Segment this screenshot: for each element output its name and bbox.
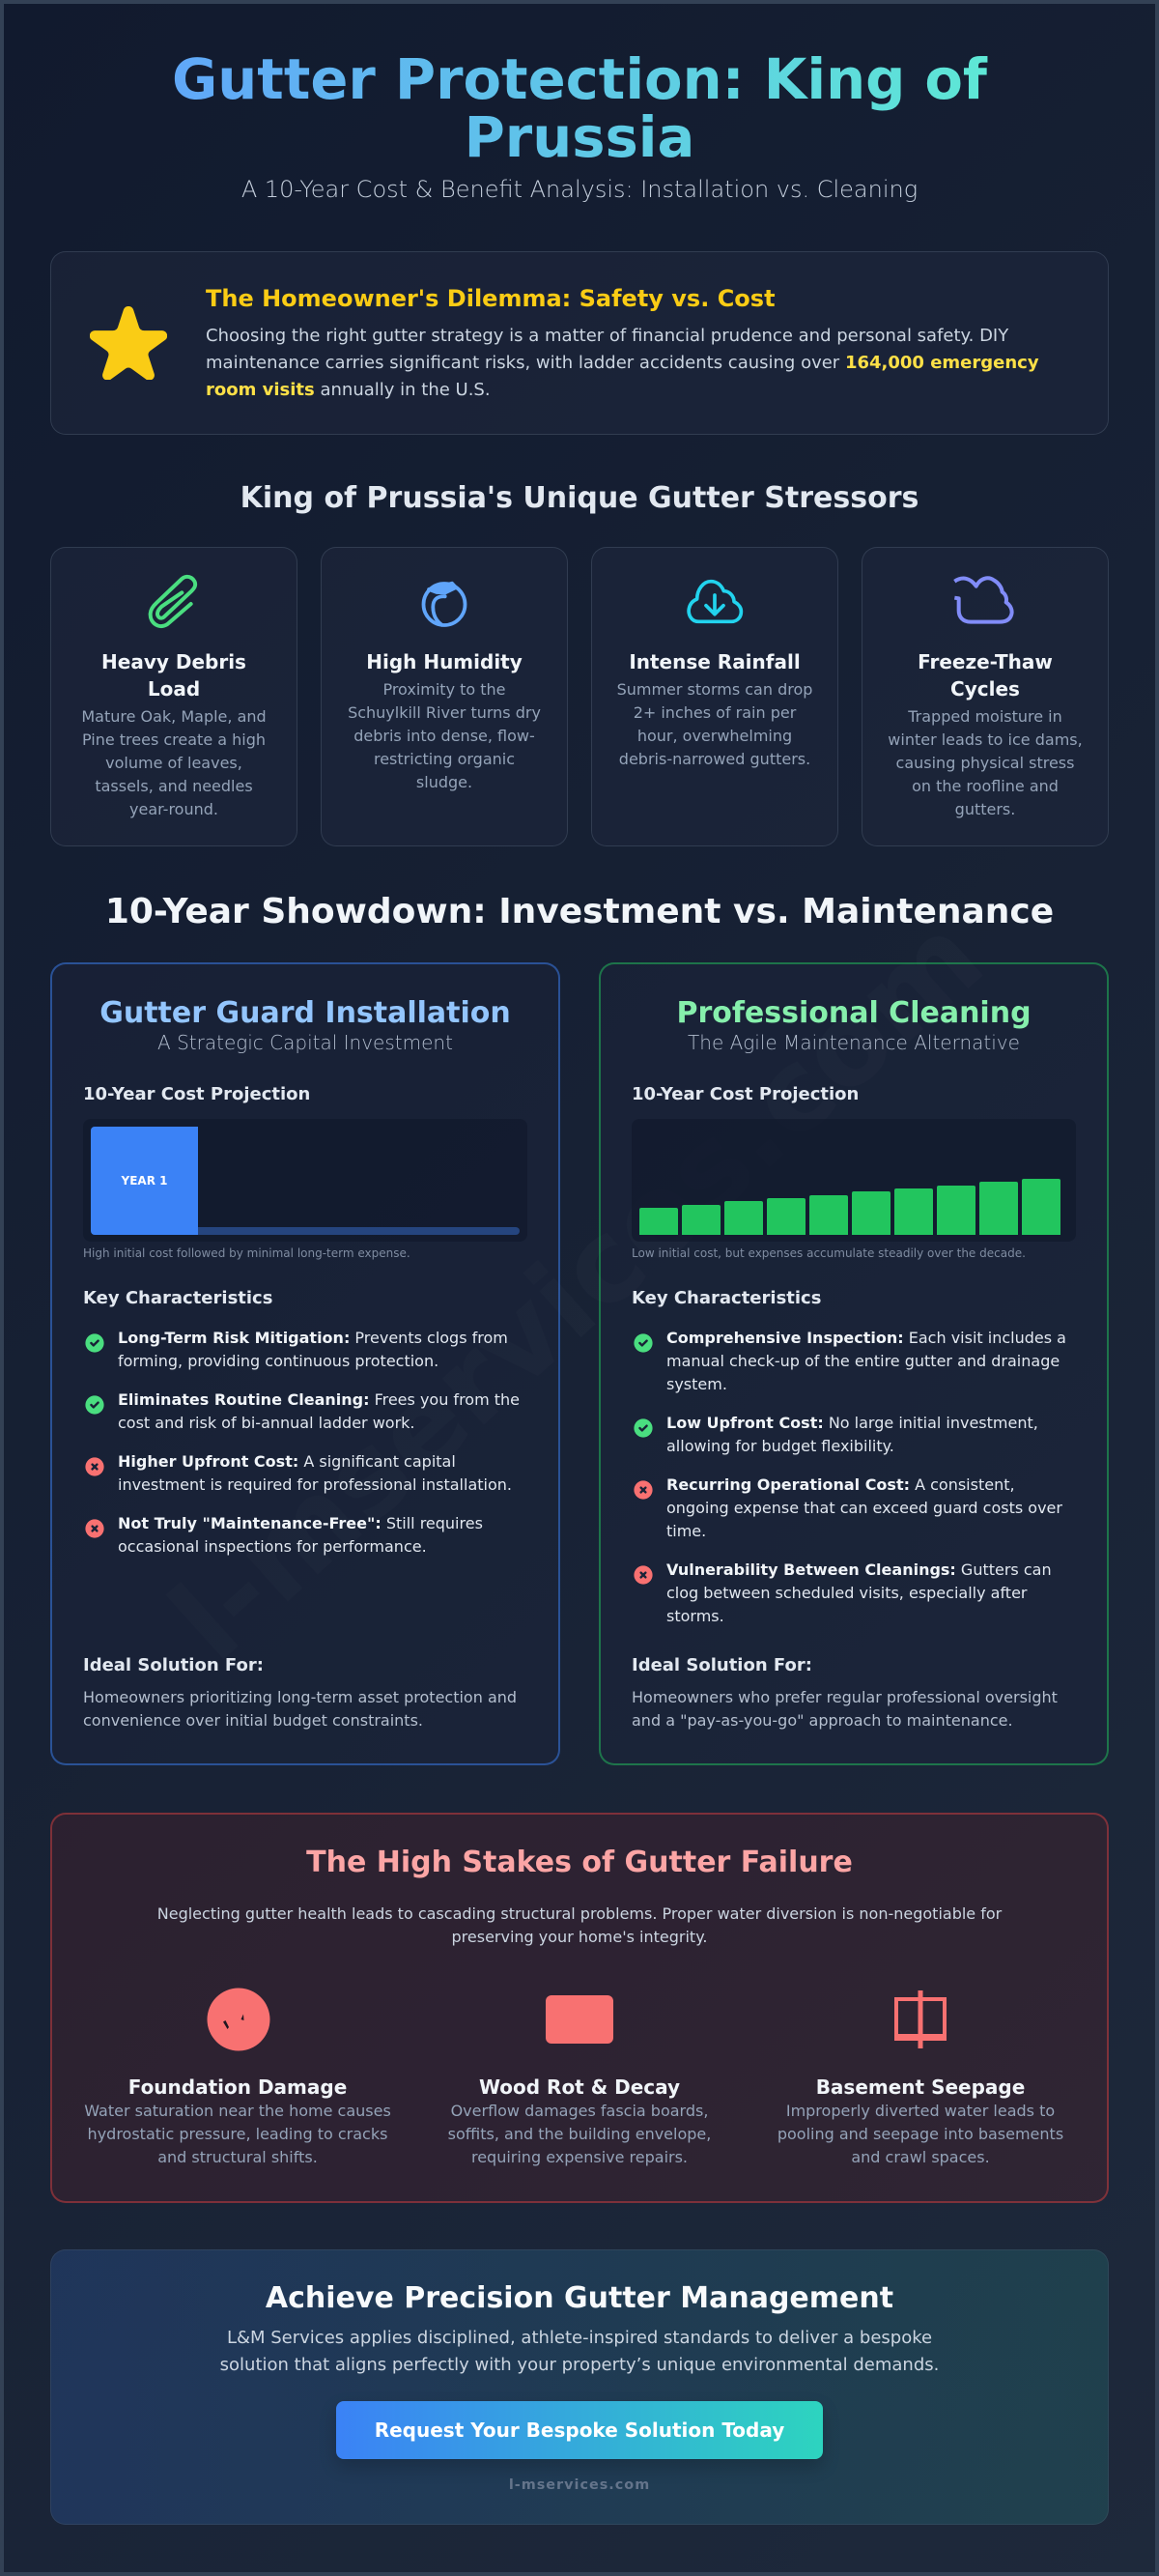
card text: on the roofline and [912, 777, 1059, 795]
list item: low upfront cost: Low Upfront Cost: No large initial investment, [666, 1414, 1038, 1432]
card text: Summer storms can drop [617, 680, 812, 699]
body text: L&M Services applies disciplined, athlete-inspired standards to deliver a bespoke [227, 2328, 932, 2348]
card text: restricting organic [374, 750, 515, 768]
panel: gutter guard installation: investment is required for professional installation. [118, 1475, 512, 1494]
list item: vulnerability [634, 1560, 1052, 1625]
card text: tassels, and needles [95, 777, 253, 795]
title: Prussia [465, 105, 694, 170]
panel: call to action [50, 2249, 1109, 2525]
list item: risk mitigation [85, 1329, 508, 1370]
card title [101, 650, 246, 701]
card text: Proximity to the [382, 680, 506, 699]
list item: vulnerability: Vulnerability Between Cleanings: Gutters can [666, 1560, 1052, 1579]
impact title: Foundation Damage [128, 2075, 347, 2099]
panel: professional cleaning: storms. [666, 1607, 724, 1625]
intro text [157, 1904, 1003, 1946]
column subtitle: A Strategic Capital Investment [157, 1031, 453, 1054]
icon: cracked foundation [207, 1989, 270, 2050]
heading: The Homeowner's Dilemma: Safety vs. Cost [206, 285, 776, 312]
panel: high stakes of gutter failure [50, 1813, 1109, 2203]
impact text: and structural shifts. [157, 2148, 318, 2166]
card text: volume of leaves, [105, 754, 242, 772]
card title: Cycles [950, 677, 1020, 701]
column title: Professional Cleaning [676, 996, 1032, 1030]
heading: showdown: 10-Year Showdown: Investment vs. Maintenance [105, 892, 1054, 931]
panel: gutter guard installation: occasional inspections for performance. [118, 1537, 427, 1556]
impact: wood rot [448, 2075, 711, 2166]
card text [81, 707, 267, 818]
impact: basement seepage [777, 2075, 1063, 2166]
card text: Trapped moisture in [908, 707, 1062, 726]
icon: humidity drop [421, 582, 467, 627]
body text [206, 326, 1039, 400]
list item: upfront cost [85, 1452, 512, 1494]
card text: gutters. [955, 800, 1015, 818]
impact text: Overflow damages fascia boards, [451, 2102, 708, 2120]
impact text: soffits, and the building envelope, [448, 2125, 711, 2143]
list item: inspection: Comprehensive Inspection: Each visit includes a [666, 1329, 1066, 1347]
subtitle: A 10-Year Cost & Benefit Analysis: Installation vs. Cleaning [241, 176, 918, 203]
card title: Heavy Debris [101, 650, 246, 673]
panel: professional cleaning: allowing for budget flexibility. [666, 1437, 894, 1455]
panel: professional cleaning: system. [666, 1375, 727, 1393]
title: Gutter Protection: King of [172, 47, 987, 112]
website: l-mservices.com [509, 2477, 650, 2493]
impact text: and crawl spaces. [851, 2148, 990, 2166]
icon: wood block [546, 1995, 613, 2044]
card title: Load [148, 677, 200, 701]
ideal text: Homeowners prioritizing long-term asset protection and [83, 1688, 517, 1706]
panel: high humidity [321, 547, 568, 846]
intro text: Neglecting gutter health leads to cascading structural problems. Proper water diversion is non-negotiable for [157, 1904, 1002, 1923]
card text: debris into dense, flow- [353, 727, 535, 745]
panel: professional cleaning [599, 962, 1109, 1765]
impact text [84, 2102, 391, 2166]
watermark: l-mservices.com [146, 890, 1007, 1686]
panel: gutter guard installation: cost and risk of bi-annual ladder work. [118, 1414, 415, 1432]
ideal text: and a "pay-as-you-go" approach to maintenance. [632, 1711, 1013, 1730]
panel: gutter guard installation: forming, providing continuous protection. [118, 1352, 438, 1370]
button [336, 2401, 823, 2459]
panel: gutter guard installation [50, 962, 560, 1765]
list heading: Key Characteristics [83, 1288, 272, 1308]
bar chart: cleaning cost [632, 1119, 1076, 1242]
body text: solution that aligns perfectly with your property’s unique environmental demands. [220, 2355, 939, 2375]
impact text [777, 2102, 1063, 2166]
button: Request Your Bespoke Solution Today [375, 2419, 784, 2442]
intro text: preserving your home's integrity. [452, 1928, 707, 1946]
body text: Choosing the right gutter strategy is a matter of financial prudence and personal safety. DIY [206, 326, 1008, 346]
icon: cloud with arrow [687, 580, 744, 624]
list item: routine cleaning [85, 1390, 520, 1432]
impact text: requiring expensive repairs. [471, 2148, 688, 2166]
bar: year 1 [91, 1127, 198, 1235]
heading: stressors: King of Prussia's Unique Gutter Stressors [240, 481, 919, 515]
ideal text [83, 1688, 517, 1730]
ideal heading: Ideal Solution For: [632, 1655, 812, 1675]
ideal text: Homeowners who prefer regular professional oversight [632, 1688, 1058, 1706]
body text [220, 2328, 939, 2375]
bar chart: guard cost [83, 1119, 527, 1242]
card text: year-round. [129, 800, 218, 818]
list item: recurring cost: Recurring Operational Cost: A consistent, [666, 1475, 1015, 1494]
list item: risk mitigation: Long-Term Risk Mitigation: Prevents clogs from [118, 1329, 508, 1347]
card text: causing physical stress [896, 754, 1074, 772]
bar: year 1: YEAR 1 [122, 1174, 167, 1188]
card title: Intense Rainfall [629, 650, 801, 673]
title [0, 51, 1159, 167]
body text: room visits annually in the U.S. [206, 380, 491, 400]
card text: hour, overwhelming [637, 727, 792, 745]
icon: broken cloud [953, 576, 1014, 624]
card text: Pine trees create a high [82, 730, 266, 749]
body text: maintenance carries significant risks, with ladder accidents causing over 164,000 emergency [206, 353, 1039, 373]
list item: low upfront cost [634, 1414, 1038, 1455]
impact text: Water saturation near the home causes [84, 2102, 391, 2120]
card text: debris-narrowed gutters. [619, 750, 810, 768]
panel: heavy debris load [50, 547, 297, 846]
bar: later years [198, 1227, 520, 1235]
impact text: Improperly diverted water leads to [786, 2102, 1055, 2120]
column title: Gutter Guard Installation [99, 996, 511, 1030]
list item: maintenance free [85, 1514, 483, 1556]
ideal text: convenience over initial budget constraints. [83, 1711, 423, 1730]
card text [348, 680, 541, 791]
impact text [448, 2102, 711, 2166]
icon: paperclip [149, 574, 197, 628]
panel: professional cleaning: time. [666, 1522, 706, 1540]
impact: foundation damage [84, 2075, 391, 2166]
ideal heading: Ideal Solution For: [83, 1655, 264, 1675]
panel: homeowner's dilemma [50, 251, 1109, 435]
card text: 2+ inches of rain per [634, 703, 796, 722]
chart heading: 10-Year Cost Projection [632, 1084, 859, 1104]
panel: professional cleaning: manual check-up of the entire gutter and drainage [666, 1352, 1060, 1370]
icon: star [90, 306, 167, 380]
card text: Mature Oak, Maple, and [81, 707, 267, 726]
card text: winter leads to ice dams, [888, 730, 1083, 749]
chart heading: 10-Year Cost Projection [83, 1084, 310, 1104]
chart caption: Low initial cost, but expenses accumulate steadily over the decade. [632, 1246, 1026, 1260]
list item: recurring cost [634, 1475, 1062, 1540]
icon: basement [894, 1990, 947, 2048]
list item: maintenance free: Not Truly "Maintenance-Free": Still requires [118, 1514, 483, 1532]
ideal text [632, 1688, 1058, 1730]
impact text: pooling and seepage into basements [777, 2125, 1063, 2143]
card text [888, 707, 1083, 818]
card title [918, 650, 1053, 701]
heading: The High Stakes of Gutter Failure [306, 1846, 853, 1879]
list heading: Key Characteristics [632, 1288, 821, 1308]
panel: freeze-thaw cycles [862, 547, 1109, 846]
card title: Freeze-Thaw [918, 650, 1053, 673]
impact title: Basement Seepage [816, 2075, 1025, 2099]
impact title: Wood Rot & Decay [479, 2075, 680, 2099]
card title: High Humidity [366, 650, 523, 673]
list item: upfront cost: Higher Upfront Cost: A significant capital [118, 1452, 456, 1471]
impact text: hydrostatic pressure, leading to cracks [88, 2125, 387, 2143]
list item: inspection [634, 1329, 1066, 1393]
heading: Achieve Precision Gutter Management [266, 2281, 893, 2315]
card text: sludge. [416, 773, 472, 791]
chart caption: High initial cost followed by minimal long-term expense. [83, 1246, 410, 1260]
card text [617, 680, 812, 768]
panel: professional cleaning: ongoing expense that can exceed guard costs over [666, 1499, 1062, 1517]
column subtitle: The Agile Maintenance Alternative [688, 1031, 1020, 1054]
card text: Schuylkill River turns dry [348, 703, 541, 722]
panel: intense rainfall [591, 547, 838, 846]
panel: professional cleaning: clog between scheduled visits, especially after [666, 1584, 1028, 1602]
list item: routine cleaning: Eliminates Routine Cleaning: Frees you from the [118, 1390, 520, 1409]
